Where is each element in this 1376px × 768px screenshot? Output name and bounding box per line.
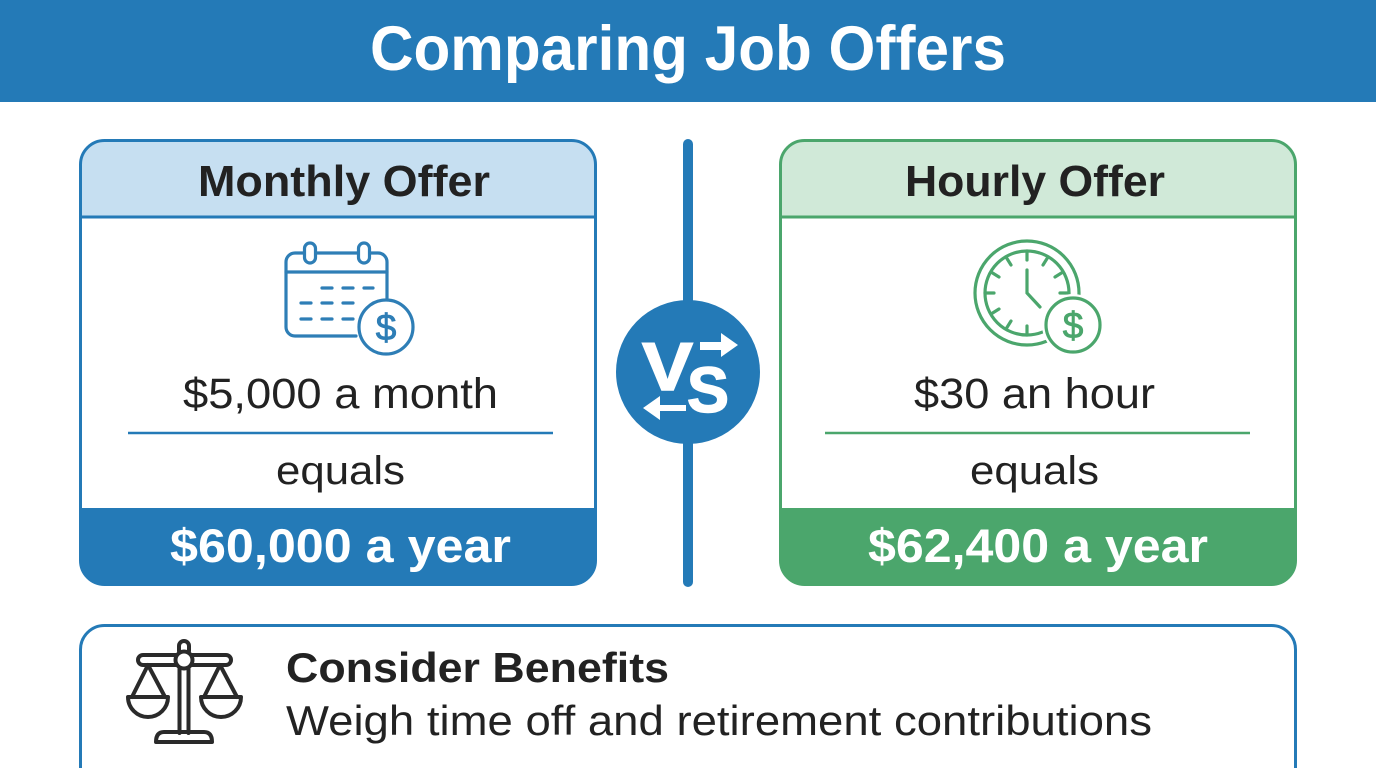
benefits heading: Consider Benefits bbox=[286, 644, 669, 691]
monthly pay: $5,000 a month bbox=[183, 370, 498, 418]
hourly card outline bbox=[780, 140, 1296, 584]
panel: monthly offer bbox=[80, 140, 596, 585]
monthly annual total: $60,000 a year bbox=[170, 519, 511, 572]
icon: calendar with dollar coin bbox=[286, 243, 413, 354]
monthly header background bbox=[81, 141, 595, 217]
icon: clock with dollar coin bbox=[975, 241, 1104, 356]
monthly footer background bbox=[81, 508, 595, 585]
hourly equals: equals bbox=[970, 449, 1099, 493]
monthly card outline bbox=[80, 140, 596, 584]
icon: versus badge: V bbox=[642, 329, 693, 405]
hourly header background bbox=[781, 141, 1295, 217]
monthly equals: equals bbox=[276, 449, 405, 493]
panel: consider benefits bbox=[80, 626, 1296, 768]
icon: versus badge bbox=[616, 300, 760, 444]
icon: balance scale bbox=[128, 641, 241, 742]
monthly heading: Monthly Offer bbox=[198, 157, 490, 206]
hourly annual total: $62,400 a year bbox=[868, 519, 1208, 572]
icon: versus badge: S bbox=[687, 354, 729, 426]
benefits text: Weigh time off and retirement contributions bbox=[286, 697, 1152, 744]
hourly heading: Hourly Offer bbox=[905, 157, 1165, 206]
icon: calendar with dollar coin: $ bbox=[376, 307, 396, 348]
panel: hourly offer bbox=[780, 140, 1296, 585]
icon: clock with dollar coin: $ bbox=[1063, 305, 1083, 346]
title: Comparing Job Offers bbox=[370, 14, 1006, 84]
hourly pay: $30 an hour bbox=[914, 370, 1155, 418]
hourly footer background bbox=[781, 508, 1295, 585]
divider line bbox=[683, 139, 693, 587]
title banner bbox=[0, 0, 1376, 102]
